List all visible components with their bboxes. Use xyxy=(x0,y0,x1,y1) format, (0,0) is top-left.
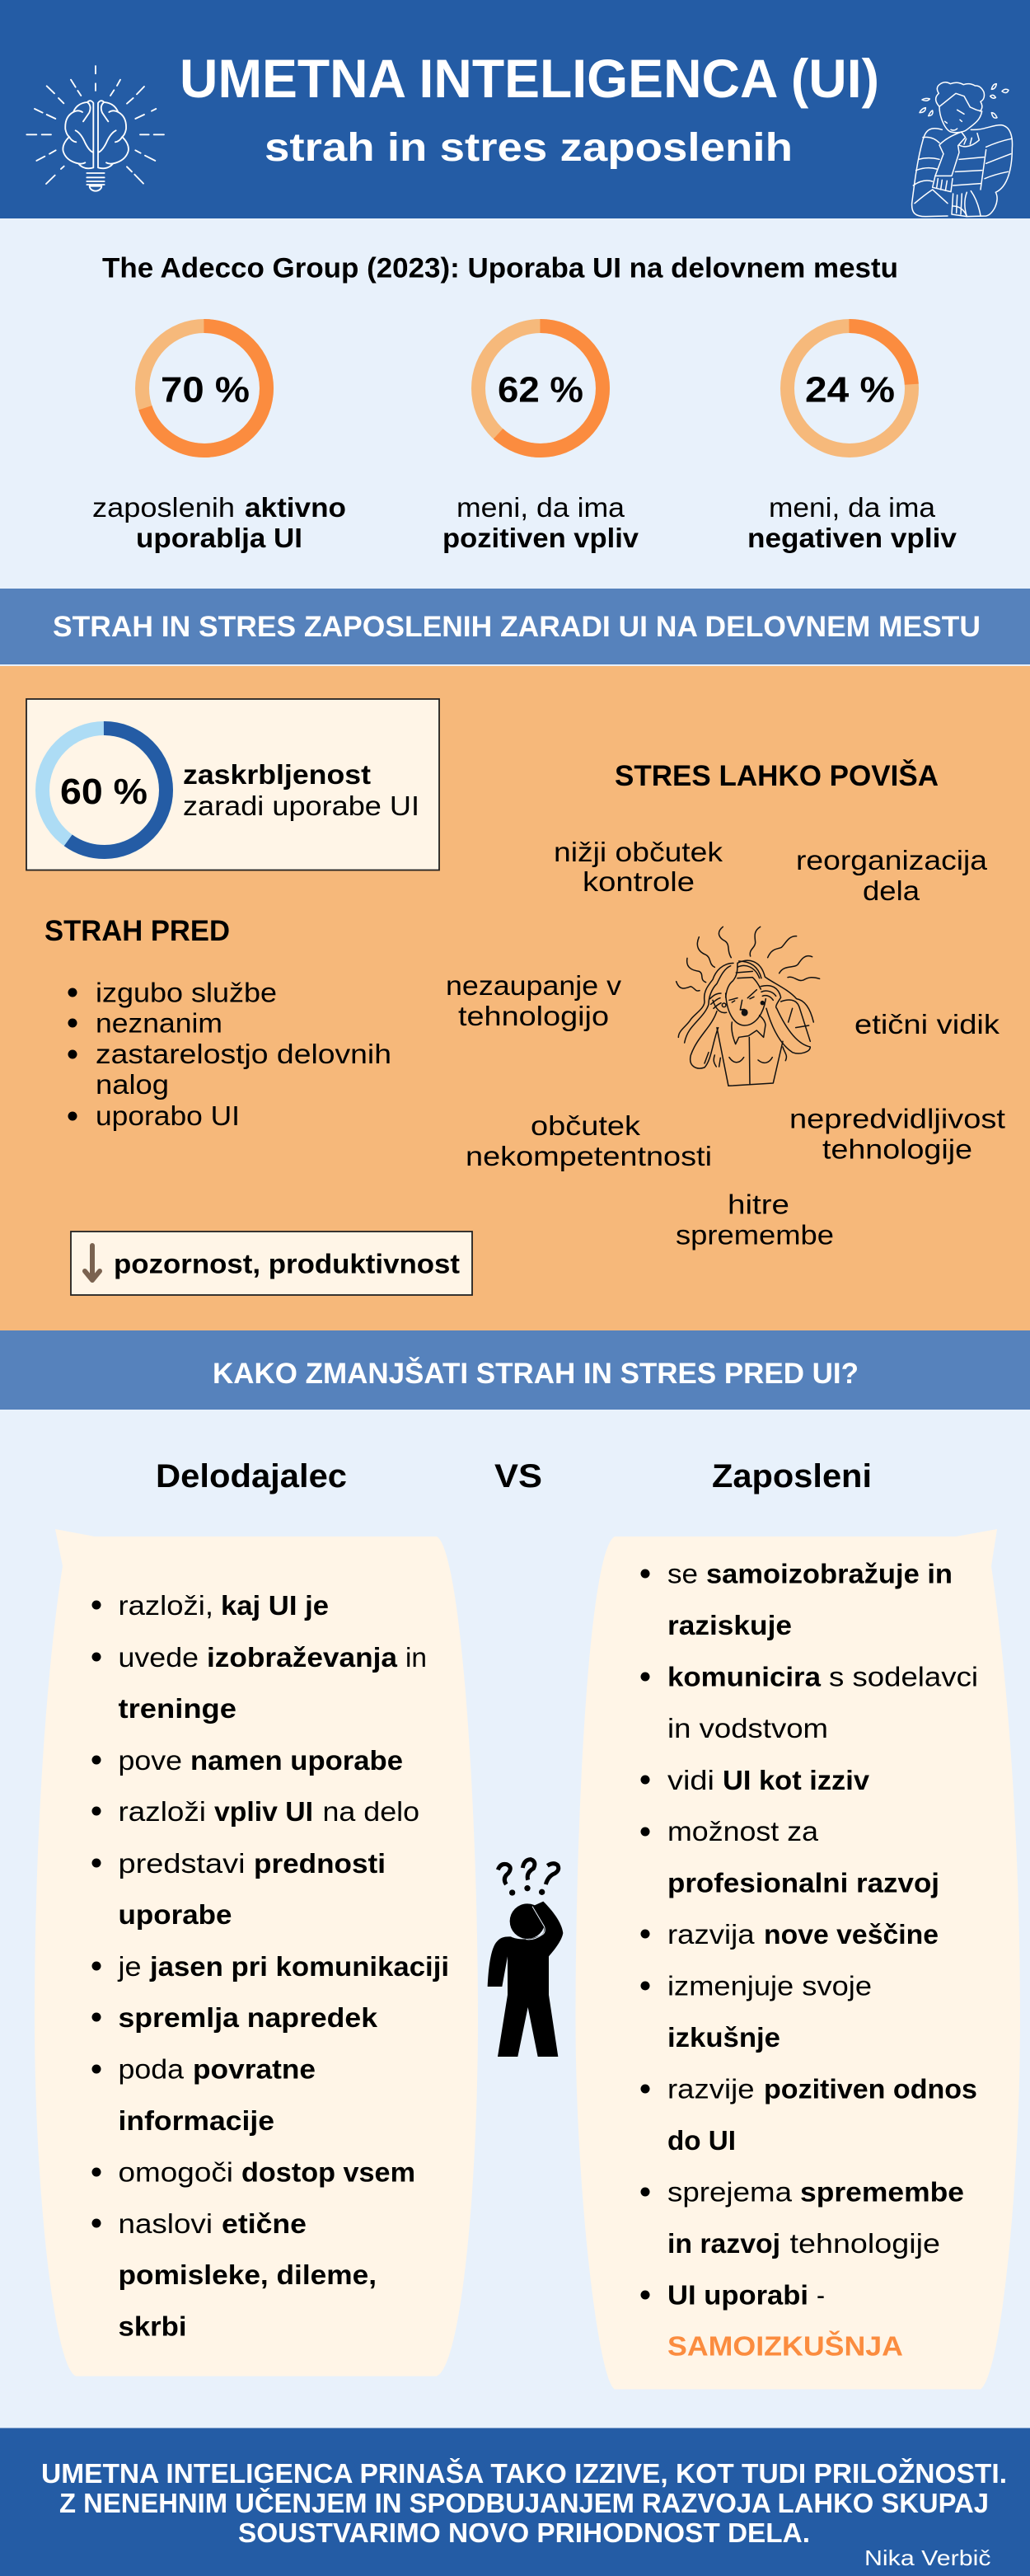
donut chart: 70 %: 70 % xyxy=(161,369,250,411)
list: employee actions: možnost za xyxy=(667,1816,819,1846)
list: employee actions: izmenjuje svoje xyxy=(667,1970,872,2001)
stress factor: sense of incompetence: občutek xyxy=(531,1110,641,1141)
donut chart: 70 % xyxy=(142,326,267,450)
conclusion text: UMETNA INTELIGENCA PRINAŠA TAKO IZZIVE, KOT TUDI PRILOŽNOSTI. xyxy=(41,2457,1007,2489)
caption: 70 % xyxy=(92,492,346,553)
panel: employer actions xyxy=(35,1529,478,2376)
callout: decreased attention and productivity: pozornost, produktivnost xyxy=(114,1248,460,1279)
heading: stress can increase: STRES LAHKO POVIŠA xyxy=(615,759,939,792)
list: employee actions: komunicira xyxy=(667,1662,822,1692)
caption: 62 %: meni, da ima xyxy=(456,492,625,523)
caption: 70 %: uporablja UI xyxy=(136,523,302,553)
list: employee actions: se xyxy=(667,1558,698,1589)
caption: 24 %: negativen vpliv xyxy=(747,523,957,553)
list: employer actions: spremlja napredek xyxy=(119,2002,378,2033)
section band: fear and stress: STRAH IN STRES ZAPOSLENIH ZARADI UI NA DELOVNEM MESTU xyxy=(53,611,981,643)
stress factor: distrust of technology: nezaupanje v xyxy=(446,970,622,1001)
author credit: Nika Verbič xyxy=(864,2546,990,2570)
list: employer actions: etične xyxy=(222,2208,307,2239)
heading: fear of: STRAH PRED xyxy=(44,915,230,947)
list: employer actions: naslovi xyxy=(119,2208,213,2239)
list: employer actions: razloži, xyxy=(119,1590,213,1621)
section band: how to reduce: KAKO ZMANJŠATI STRAH IN STRES PRED UI? xyxy=(213,1357,859,1390)
list: employee actions: tehnologije xyxy=(789,2228,940,2259)
caption: 62 %: pozitiven vpliv xyxy=(442,523,639,553)
icon: confused figure with question marks xyxy=(488,1860,563,2057)
heading: Adecco Group: The Adecco Group (2023): Uporaba UI na delovnem mestu xyxy=(102,252,898,284)
list: employer actions: vpliv UI xyxy=(214,1796,313,1827)
stress factor: lower sense of control xyxy=(554,837,723,897)
donut chart: 24 % xyxy=(788,326,911,450)
caption: 62 % xyxy=(442,492,639,553)
stress factor: unpredictable technology: nepredvidljivost xyxy=(789,1103,1005,1134)
list: employer actions: jasen pri komunikaciji xyxy=(149,1951,449,1982)
stress factor: reorganization: reorganizacija xyxy=(796,845,988,875)
list: employee actions: raziskuje xyxy=(667,1610,792,1640)
stress factor: unpredictable technology xyxy=(789,1103,1005,1164)
list: employer actions: in xyxy=(405,1642,427,1673)
callout: 60 % worry xyxy=(26,699,439,870)
heading: employee: Zaposleni xyxy=(712,1458,872,1494)
list: employee actions: sprejema xyxy=(667,2176,793,2208)
list: employer actions: kaj UI je xyxy=(221,1590,329,1621)
stress factor: rapid change xyxy=(676,1189,834,1250)
subtitle: strah in stres zaposlenih xyxy=(265,126,793,170)
list: employer actions: povratne xyxy=(193,2054,316,2084)
list: employer actions: pove xyxy=(119,1745,182,1776)
stress factor: rapid change: hitre xyxy=(728,1189,789,1220)
list: employer actions: izobraževanja xyxy=(207,1642,398,1673)
list: employee actions: do UI xyxy=(667,2125,736,2156)
stress factor: ethical aspect: etični vidik xyxy=(854,1009,1000,1039)
list: employee actions: vidi xyxy=(667,1765,714,1795)
stress factor: lower sense of control: nižji občutek xyxy=(554,837,723,867)
list: employer actions: omogoči xyxy=(119,2156,233,2188)
icon: stressed person xyxy=(912,82,1013,217)
stress factor: sense of incompetence xyxy=(466,1110,712,1171)
list: employer actions: dostop vsem xyxy=(241,2156,415,2188)
icon: stressed woman xyxy=(677,927,820,1086)
list: employee actions: razvije xyxy=(667,2074,755,2104)
title: UMETNA INTELIGENCA (UI) xyxy=(180,48,879,109)
heading: employer: Delodajalec xyxy=(156,1458,347,1494)
footer banner xyxy=(0,2428,1030,2576)
stress factor: reorganization xyxy=(796,845,988,906)
list: employer actions: uvede xyxy=(119,1642,199,1673)
stress factor: distrust of technology: tehnologijo xyxy=(458,1001,609,1031)
caption: 70 %: aktivno xyxy=(245,492,346,523)
panel: Adecco statistics xyxy=(92,252,957,553)
list: fears xyxy=(68,978,391,1131)
callout: 60 % worry: 60 % xyxy=(60,772,147,812)
heading: versus: VS xyxy=(494,1458,542,1494)
callout: 60 % worry: zaradi uporabe UI xyxy=(183,791,419,821)
list: employee actions: - xyxy=(817,2280,825,2310)
donut chart: 62 %: 62 % xyxy=(498,369,583,411)
list: employer actions: skrbi xyxy=(119,2311,186,2341)
header banner xyxy=(0,0,1030,218)
donut chart: 62 % xyxy=(478,326,603,450)
list: employer actions: razloži xyxy=(119,1796,206,1827)
stress factor: sense of incompetence: nekompetentnosti xyxy=(466,1141,712,1171)
caption: 24 %: meni, da ima xyxy=(769,492,936,523)
callout: decreased attention and productivity xyxy=(71,1232,472,1295)
list: employer actions: pomisleke, dileme, xyxy=(119,2259,377,2290)
list: employee actions: spremembe xyxy=(800,2176,964,2208)
stress factor: distrust of technology xyxy=(446,970,622,1031)
list: employer actions: na delo xyxy=(323,1796,419,1827)
list: employer actions: je xyxy=(117,1951,142,1982)
list: employee actions: UI kot izziv xyxy=(723,1765,870,1795)
list: fears: uporabo UI xyxy=(96,1100,240,1131)
list: employer actions: predstavi xyxy=(119,1848,246,1879)
caption: 24 % xyxy=(747,492,957,553)
stress factor: lower sense of control: kontrole xyxy=(583,866,695,897)
list: employee actions: in razvoj xyxy=(667,2228,780,2259)
callout: 60 % worry: zaskrbljenost xyxy=(183,759,371,790)
list: employee actions: SAMOIZKUŠNJA xyxy=(667,2330,903,2361)
conclusion text: SOUSTVARIMO NOVO PRIHODNOST DELA. xyxy=(238,2517,810,2548)
stress factor: unpredictable technology: tehnologije xyxy=(822,1134,972,1164)
list: employee actions: nove veščine xyxy=(764,1919,939,1950)
list: fears: nalog xyxy=(96,1069,169,1100)
list: employer actions xyxy=(92,1590,449,2341)
list: employee actions: s sodelavci xyxy=(829,1662,978,1692)
list: employer actions: poda xyxy=(119,2054,185,2084)
list: employee actions: UI uporabi xyxy=(667,2280,808,2310)
list: employee actions: pozitiven odnos xyxy=(764,2074,977,2104)
stress factor: rapid change: spremembe xyxy=(676,1220,834,1250)
list: employer actions: informacije xyxy=(119,2105,274,2136)
list: employer actions: uporabe xyxy=(119,1899,232,1930)
list: employee actions xyxy=(641,1558,978,2361)
list: fears: izgubo službe xyxy=(96,978,277,1007)
stress factor: reorganization: dela xyxy=(863,875,920,906)
section band: how to reduce xyxy=(0,1330,1030,1410)
list: employee actions: profesionalni razvoj xyxy=(667,1868,939,1898)
section band: fear and stress xyxy=(0,589,1030,664)
icon: brain light bulb xyxy=(26,66,164,191)
conclusion text: Z NENEHNIM UČENJEM IN SPODBUJANJEM RAZVOJA LAHKO SKUPAJ xyxy=(59,2487,989,2518)
list: employee actions: in vodstvom xyxy=(667,1713,828,1743)
list: employer actions: treninge xyxy=(119,1693,236,1724)
conclusion text xyxy=(41,2457,1007,2548)
list: employer actions: namen uporabe xyxy=(190,1745,403,1776)
panel: fear and stress xyxy=(0,666,1030,1330)
list: employee actions: izkušnje xyxy=(667,2022,780,2053)
list: fears: zastarelostjo delovnih xyxy=(96,1039,391,1069)
list: employee actions: samoizobražuje in xyxy=(706,1558,953,1589)
list: employer actions: prednosti xyxy=(254,1848,386,1879)
list: employee actions: razvija xyxy=(667,1919,755,1950)
list: fears: neznanim xyxy=(96,1007,222,1039)
donut chart: 24 %: 24 % xyxy=(805,369,895,411)
caption: 70 %: zaposlenih xyxy=(92,492,235,523)
panel: employee actions xyxy=(575,1529,1020,2389)
